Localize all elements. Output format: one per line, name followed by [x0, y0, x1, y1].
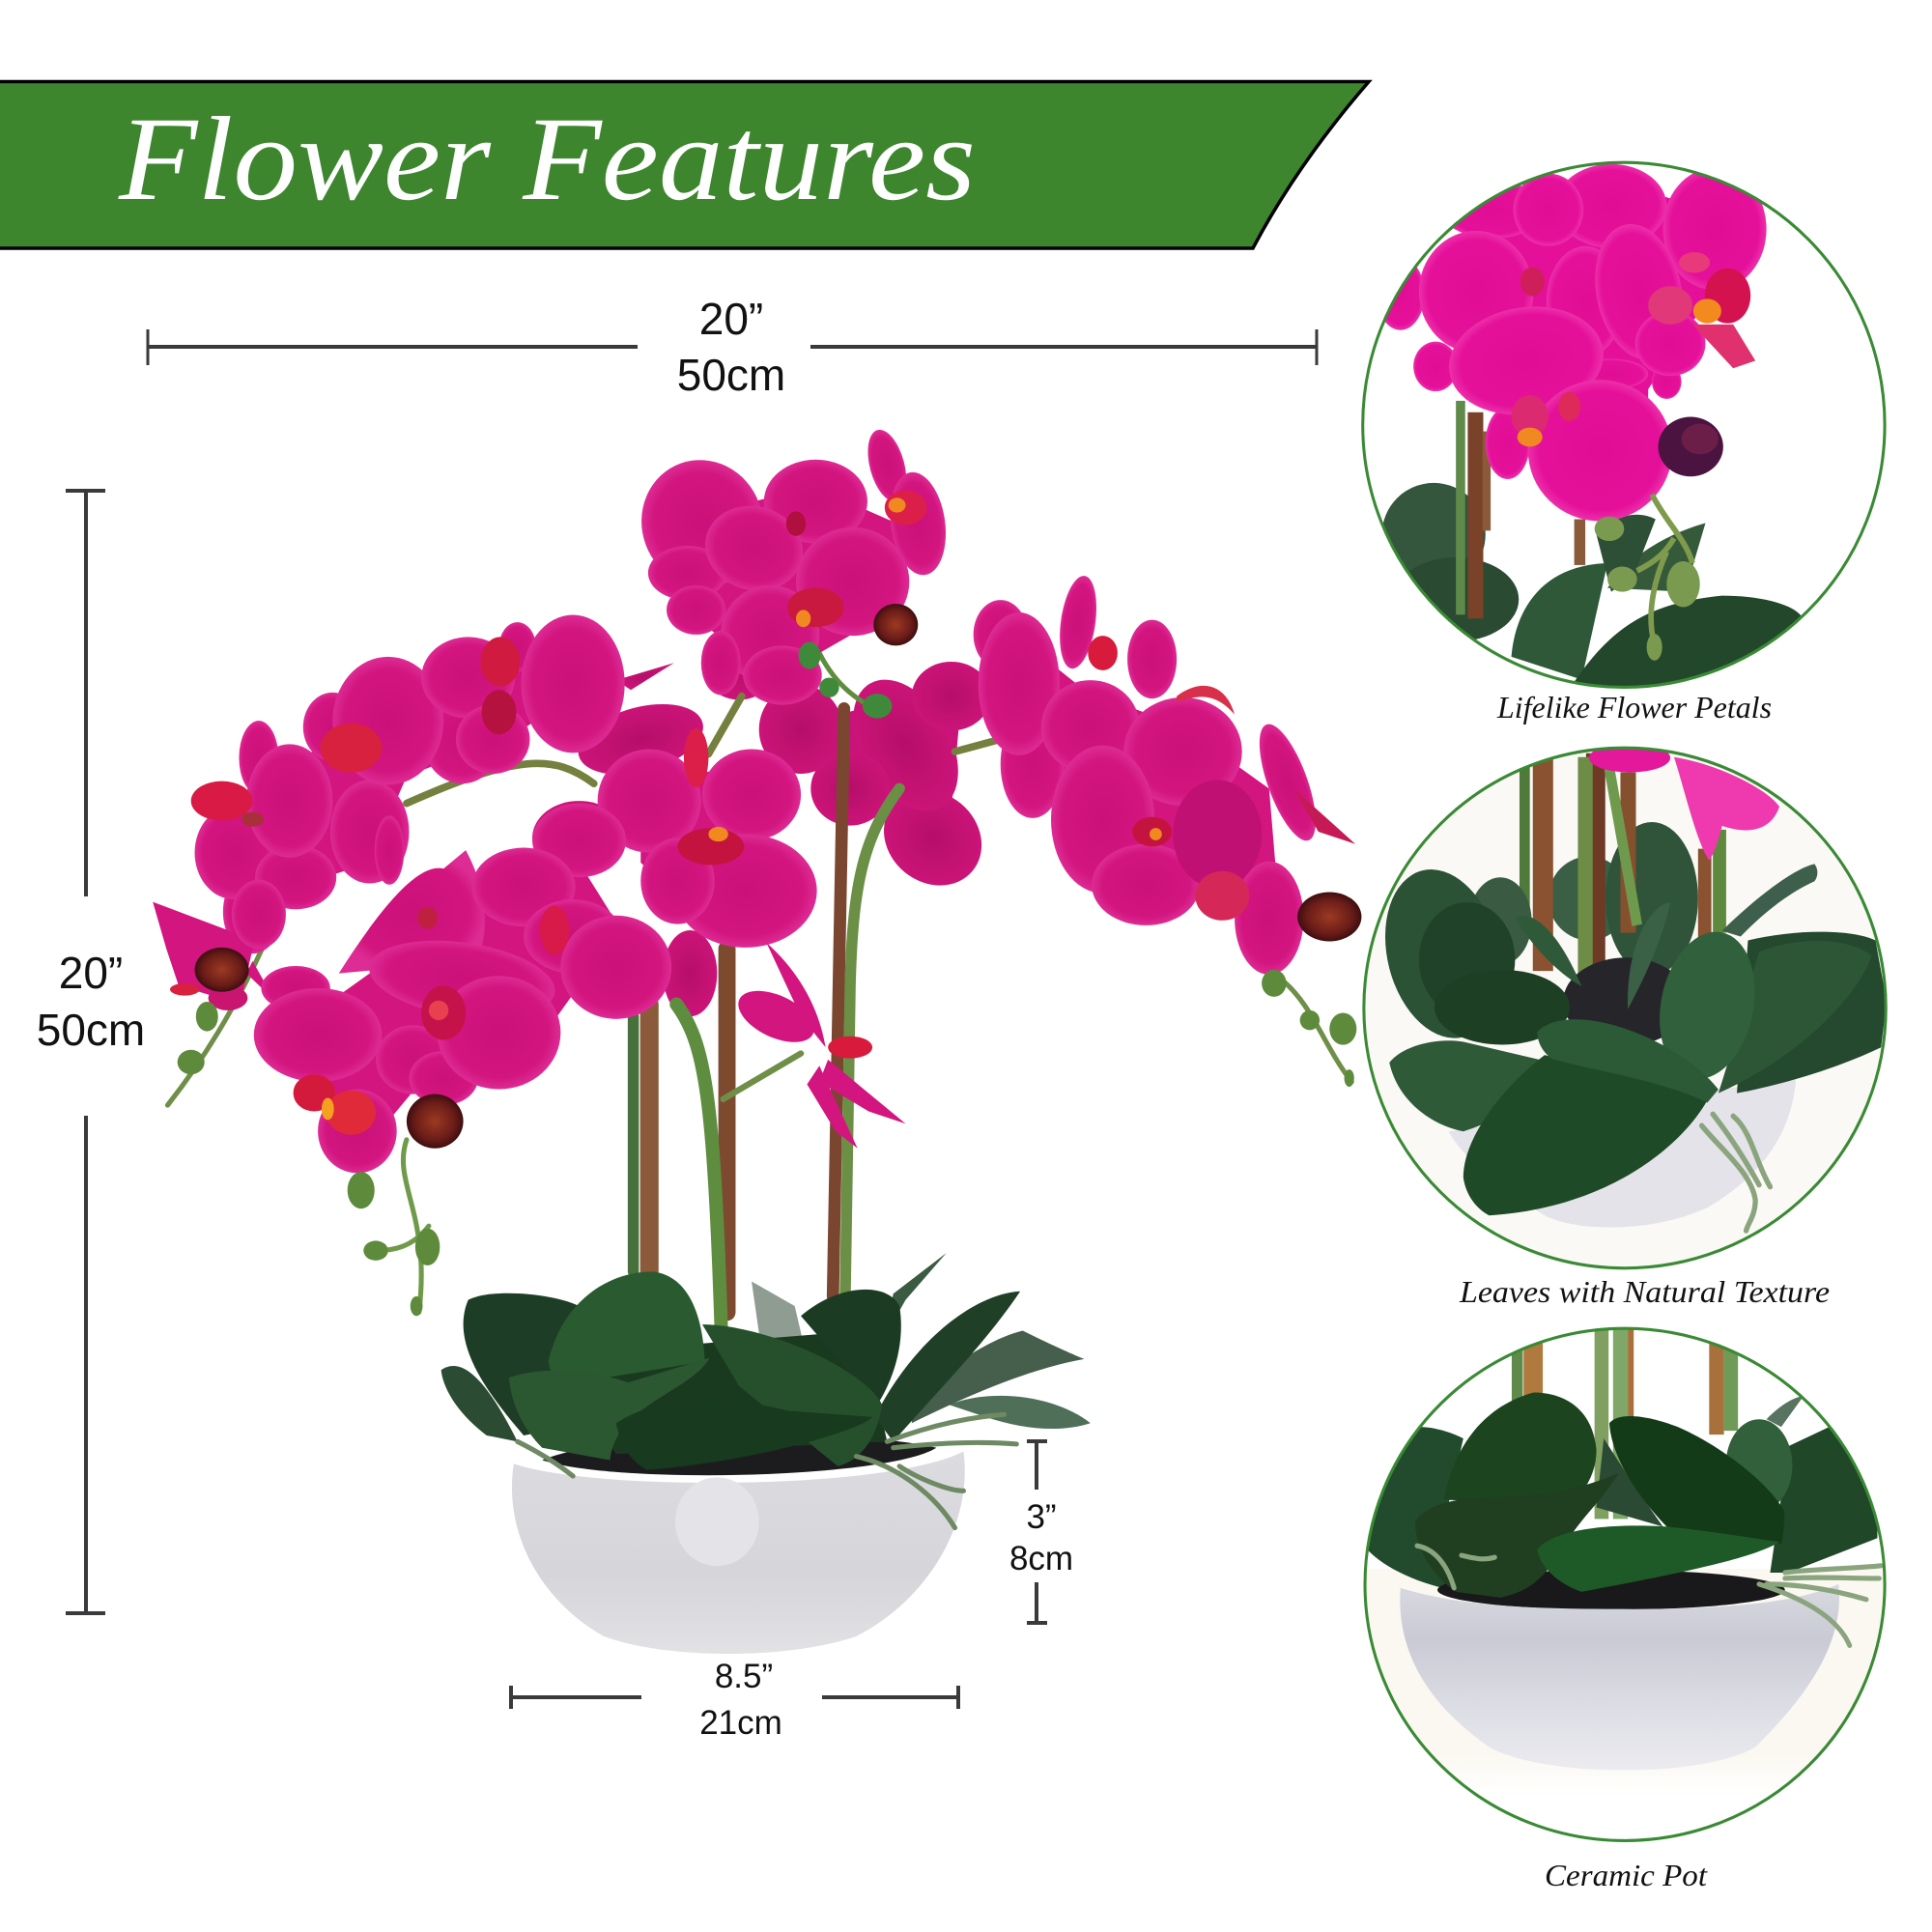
- back leaves: [1367, 1396, 1877, 1592]
- flower cluster: lower left: [254, 804, 671, 1173]
- white pot: [1449, 1078, 1796, 1228]
- front leaves: [1389, 1019, 1719, 1215]
- flower cluster: top centre: [624, 426, 952, 705]
- purple bud: [1658, 417, 1723, 476]
- left height dimension: 50cm: [37, 1005, 145, 1055]
- back petals: [532, 631, 1001, 1016]
- aerial roots: [518, 1414, 1016, 1528]
- soil: [542, 1435, 936, 1475]
- stems: [1456, 401, 1585, 618]
- top width dimension: 50cm: [677, 350, 785, 400]
- flower cluster: left arc: [195, 614, 625, 953]
- left leaves: [1385, 869, 1671, 1045]
- stems: [1512, 1327, 1738, 1519]
- front leaves: [1415, 1392, 1792, 1598]
- title banner: [0, 81, 1369, 248]
- flower centres: [1512, 252, 1755, 446]
- flower cluster: right: [974, 574, 1327, 975]
- pot width dimension: [511, 1658, 958, 1742]
- roots: [1702, 1114, 1770, 1231]
- soil: [1437, 1570, 1785, 1609]
- main orchid plant in white pot: [153, 426, 1361, 1654]
- pot height dimension: 3”: [1026, 1498, 1057, 1536]
- panel: leaves with natural texture: [1362, 746, 1888, 1269]
- top width dimension: 20”: [699, 294, 763, 344]
- blurred background leaves: [1382, 483, 1804, 687]
- left height dimension: [37, 491, 145, 1613]
- green buds: [1595, 495, 1700, 661]
- pink petals: [1589, 743, 1779, 860]
- small left flower with bud: [153, 880, 286, 1010]
- small lower centre flower: [730, 943, 905, 1149]
- flower cluster: central: [598, 750, 817, 948]
- pot height dimension: [1009, 1441, 1073, 1623]
- panel: lifelike flower petals: [1361, 160, 1887, 689]
- stems and bamboo supports: [167, 653, 1351, 1392]
- right leaves: [1647, 864, 1887, 1094]
- roots: [1417, 1546, 1881, 1645]
- caption: lifelike flower petals: Lifelike Flower Petals: [1496, 690, 1772, 724]
- pot width dimension: 21cm: [699, 1704, 782, 1742]
- pot width dimension: 8.5”: [715, 1658, 773, 1695]
- caption: leaves with natural texture: Leaves with Natural Texture: [1459, 1274, 1830, 1309]
- buds: [178, 604, 1361, 1316]
- title: Flower Features: [118, 93, 976, 225]
- white ceramic pot: [512, 1452, 965, 1654]
- left height dimension: 20”: [59, 948, 123, 998]
- petals: [1377, 164, 1767, 521]
- stems and back leaves: [1520, 753, 1726, 974]
- pot height dimension: 8cm: [1009, 1540, 1073, 1577]
- white ceramic bowl: [1400, 1584, 1839, 1770]
- orchid leaves: [441, 1253, 1091, 1470]
- caption: ceramic pot: Ceramic Pot: [1545, 1858, 1708, 1892]
- top width dimension: [148, 294, 1317, 400]
- panel: ceramic pot: [1364, 1327, 1887, 1842]
